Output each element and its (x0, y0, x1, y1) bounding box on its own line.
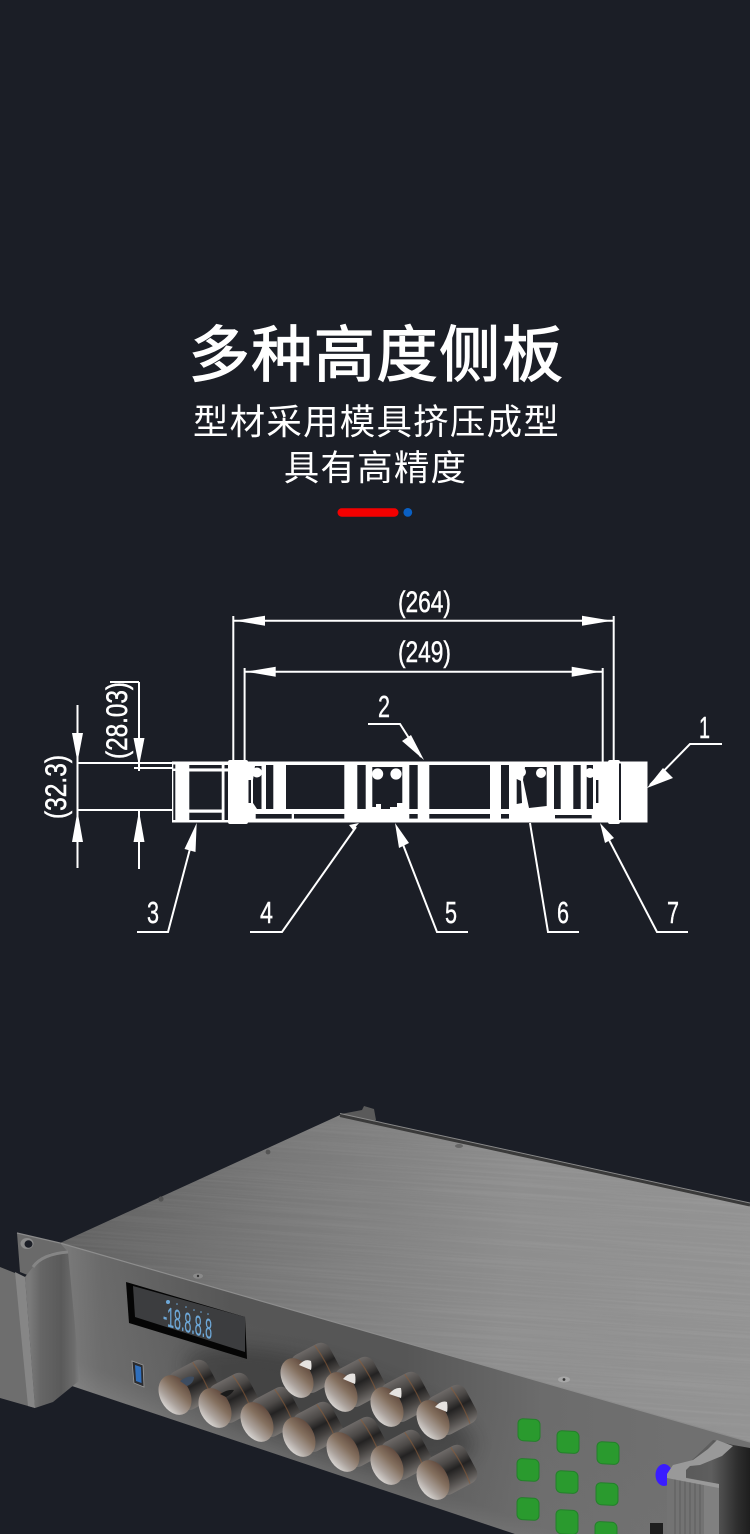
dimension: 32.3 (40, 705, 172, 868)
callout 6 (530, 823, 579, 932)
blue dot (403, 508, 412, 517)
callout 4 (250, 823, 359, 932)
top panel (61, 1113, 750, 1442)
subtitle line 2: 具有高精度 (284, 448, 467, 488)
callout 2 (368, 689, 424, 760)
dimension: 249 (245, 636, 603, 762)
green button grid (517, 1418, 619, 1534)
left rack ear (0, 1233, 80, 1408)
small port (650, 1523, 663, 1534)
callout 5: 5 (445, 895, 457, 930)
title: 多种高度侧板 (189, 321, 564, 389)
technical drawing (40, 586, 722, 932)
dimension: 28.03: (28.03) (101, 682, 134, 759)
red bar (338, 508, 398, 517)
dimension: 264 (233, 586, 614, 762)
callout 1: 1 (699, 710, 710, 745)
LCD display: -18.8.8.8 (163, 1301, 212, 1346)
progress accent (338, 508, 412, 517)
knobs (152, 1339, 481, 1506)
LCD display (126, 1282, 247, 1359)
dimension: 264: (264) (398, 586, 451, 619)
front panel (60, 1243, 750, 1534)
right rack ear (667, 1440, 750, 1534)
callout 7: 7 (667, 895, 679, 930)
side plate profile (172, 760, 648, 824)
rear bracket (341, 1106, 376, 1124)
product: rack chassis (0, 1064, 750, 1534)
dimension: 32.3: (32.3) (40, 755, 73, 819)
callout 7 (600, 823, 688, 932)
dimension: 28.03 (101, 682, 172, 869)
callout 4: 4 (260, 895, 273, 930)
callout 1 (647, 710, 722, 788)
callout 3: 3 (147, 895, 159, 930)
callout 3 (137, 823, 197, 932)
subtitle line 1: 型材采用模具挤压成型 (193, 402, 560, 442)
callout 5 (395, 823, 468, 932)
blue indicator (656, 1464, 672, 1486)
USB port (132, 1361, 144, 1387)
dimension: 249: (249) (398, 636, 451, 669)
callout 6: 6 (557, 895, 569, 930)
callout 2: 2 (378, 689, 390, 724)
